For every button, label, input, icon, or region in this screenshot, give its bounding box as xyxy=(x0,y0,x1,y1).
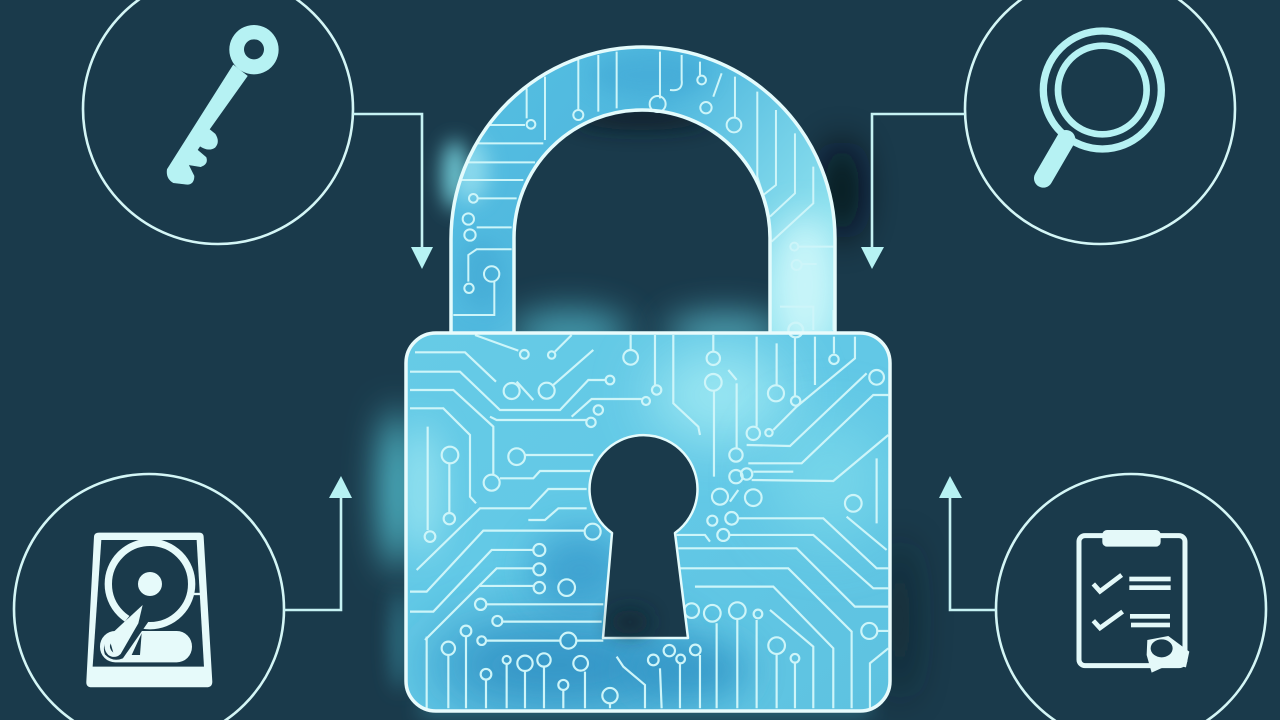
circle: checklist xyxy=(996,474,1266,720)
icon: key xyxy=(167,25,279,184)
arrow: hard drive to padlock xyxy=(284,476,352,610)
padlock xyxy=(400,47,890,711)
keyhole xyxy=(590,435,698,638)
circle: hard drive xyxy=(14,474,284,720)
icon: hard drive xyxy=(86,533,212,687)
circle: key xyxy=(83,0,353,244)
arrow: checklist to padlock xyxy=(939,476,996,610)
body circuit traces xyxy=(410,323,888,708)
shackle circuit traces xyxy=(453,52,833,347)
shadow and glow behind padlock xyxy=(382,106,914,714)
icon: magnifying glass xyxy=(1043,31,1161,178)
padlock body xyxy=(400,323,890,711)
arrow: key to padlock xyxy=(353,114,433,269)
padlock shackle xyxy=(451,47,839,355)
icon: clipboard checklist xyxy=(1079,530,1189,673)
arrow: magnifier to padlock xyxy=(861,114,965,269)
circle: magnifier xyxy=(965,0,1235,244)
